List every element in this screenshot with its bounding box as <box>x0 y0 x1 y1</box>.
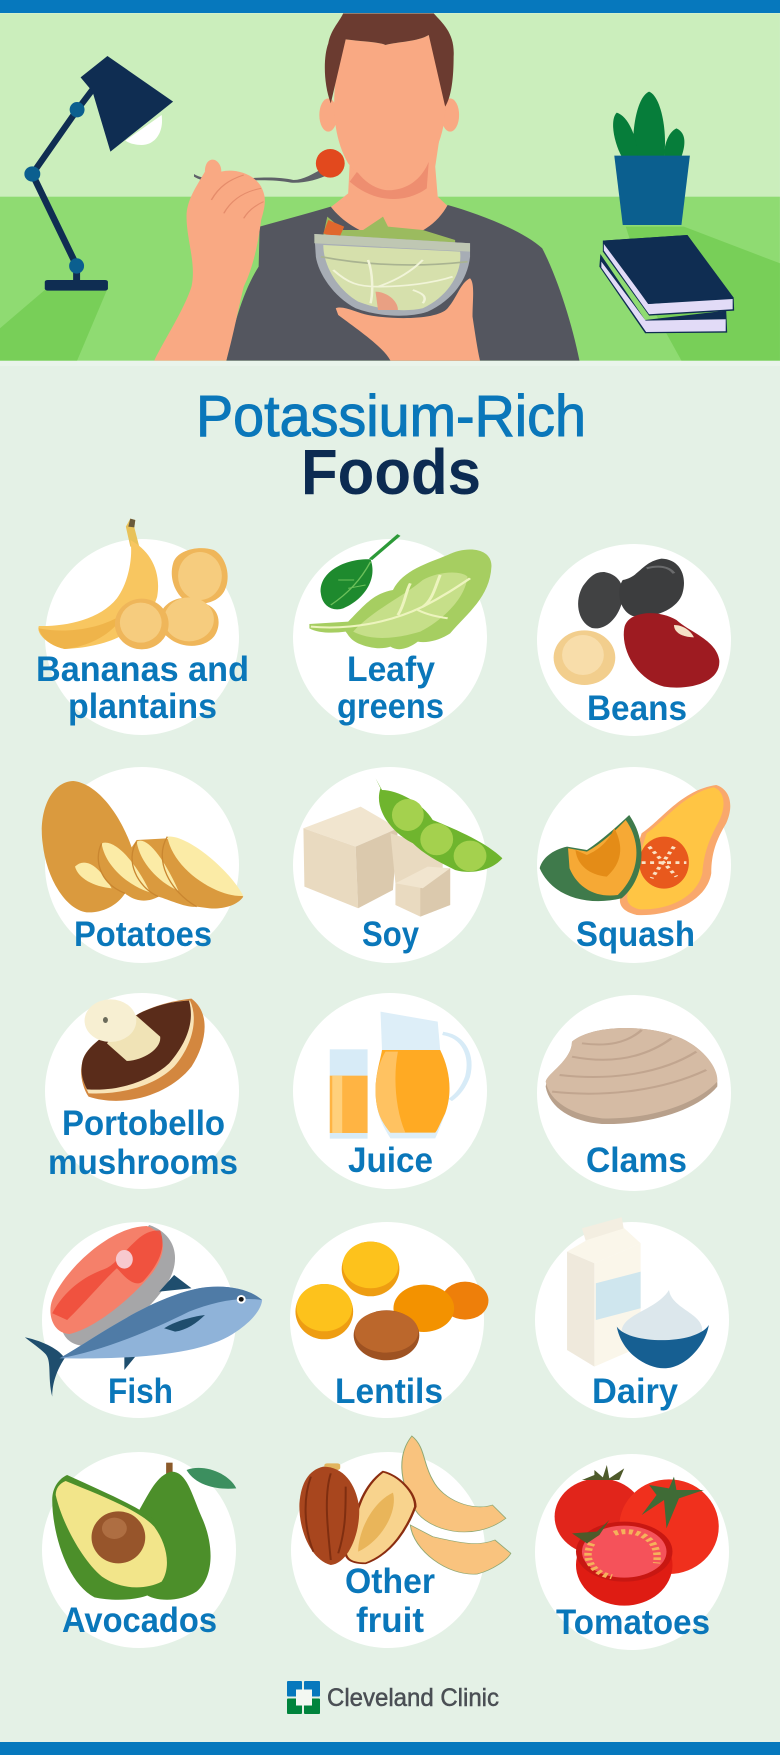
top bar <box>0 0 780 13</box>
label: Dairy <box>592 1372 679 1411</box>
panel: leafy greens <box>293 535 491 735</box>
panel: squash <box>537 767 731 963</box>
label: mushrooms <box>48 1143 238 1182</box>
label <box>36 650 249 726</box>
bottom bar <box>0 1742 780 1755</box>
icon: tofu and edamame <box>303 778 502 917</box>
panel: dairy <box>535 1217 729 1418</box>
icon: tomatoes <box>555 1465 719 1606</box>
label <box>48 1104 238 1182</box>
icon: beans <box>554 559 719 688</box>
label: Other <box>345 1562 435 1601</box>
panel: clams <box>537 995 731 1191</box>
icon: stacked books <box>599 235 734 333</box>
label <box>345 1562 435 1640</box>
panel: potatoes <box>42 767 243 963</box>
title: Foods <box>301 436 481 508</box>
icon: salmon steak and tuna <box>25 1225 262 1397</box>
panel: avocados <box>42 1452 236 1648</box>
label: Juice <box>348 1141 433 1180</box>
label: Lentils <box>335 1372 443 1411</box>
icon: clam shell <box>546 1028 717 1124</box>
icon: sliced potato <box>42 781 243 912</box>
panel: juice <box>293 993 487 1189</box>
label: Squash <box>576 915 695 954</box>
icon: lentils <box>295 1242 488 1360</box>
icon: milk carton and yogurt <box>567 1217 709 1368</box>
label: Potatoes <box>74 915 212 954</box>
label: Bananas and <box>36 650 249 689</box>
page background below hero <box>0 361 780 366</box>
label: Portobello <box>62 1104 225 1143</box>
panel: tomatoes <box>535 1454 729 1650</box>
icon: spinach and lettuce leaves <box>309 535 491 649</box>
logo wordmark: Cleveland Clinic <box>327 1684 499 1712</box>
label: Tomatoes <box>556 1603 710 1642</box>
icon: Cleveland Clinic cross <box>287 1681 320 1714</box>
label: plantains <box>68 687 217 726</box>
icon: banana and plantain slices <box>38 519 228 649</box>
label: greens <box>337 687 444 726</box>
panel: soy <box>293 767 502 963</box>
title: Potassium-Rich <box>196 384 586 449</box>
label: Avocados <box>62 1601 217 1640</box>
icon: potted plant <box>613 92 690 225</box>
icon: desk lamp <box>24 56 173 291</box>
label: Leafy <box>347 650 436 689</box>
title <box>196 384 586 508</box>
panel: fish <box>25 1222 262 1418</box>
label: Soy <box>362 915 419 954</box>
label: Clams <box>586 1141 687 1180</box>
person <box>154 13 579 361</box>
hero illustration: man eating salad at a desk <box>0 13 780 361</box>
icon: dates and melon <box>299 1436 511 1574</box>
label: Beans <box>587 689 687 728</box>
label: Fish <box>108 1372 173 1411</box>
label <box>337 650 444 726</box>
icon: salad bowl <box>314 217 470 316</box>
icon: avocado <box>52 1463 236 1600</box>
icon: hand holding the bowl <box>336 278 480 361</box>
icon: portobello mushroom <box>81 999 205 1101</box>
icon: juice glass and pitcher <box>330 1012 469 1139</box>
panel: other fruit <box>291 1436 511 1648</box>
label: fruit <box>356 1601 424 1640</box>
panel: beans <box>537 544 731 736</box>
panel: portobello mushrooms <box>45 993 239 1189</box>
panel: bananas and plantains <box>36 519 249 735</box>
logo: Cleveland Clinic <box>287 1681 499 1714</box>
panel: lentils <box>290 1222 488 1418</box>
icon: butternut and kabocha squash <box>540 785 730 915</box>
